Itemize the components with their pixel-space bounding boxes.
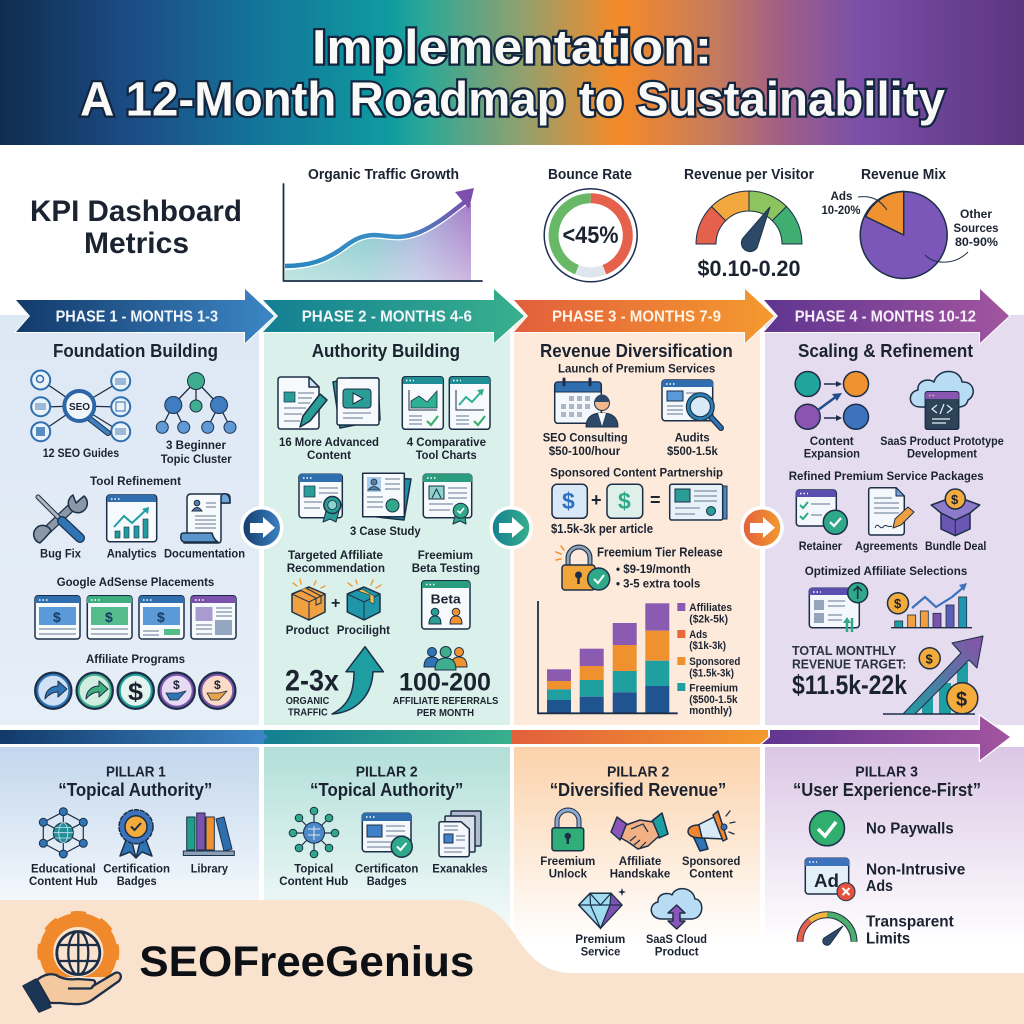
label: 16 more advanced content: Content: [307, 448, 351, 462]
label: 4 comparative tool charts: Tool Charts: [416, 448, 477, 462]
arrow: phase 4 banner: [764, 289, 1009, 343]
stat: total monthly revenue target: TOTAL MONTHLY: [792, 643, 897, 658]
icon: adsense layouts: $: [105, 609, 113, 625]
gauge: revenue per visitor: [684, 167, 814, 281]
label: topic cluster: Topic Cluster: [161, 452, 232, 466]
heading: user experience first: PILLAR 3: [855, 764, 918, 781]
icon: certification badge: [119, 810, 153, 858]
label: 16 more advanced content: 16 More Advanced: [279, 435, 379, 449]
label: library: Library: [191, 861, 228, 875]
label: affiliate handshake: [610, 854, 671, 881]
icon: freemium lock: [556, 546, 610, 590]
arrow: phase 1 banner: [16, 289, 274, 343]
chart: stacked revenue bars: [538, 601, 678, 713]
title line 1: Implementation:: [312, 22, 712, 74]
pie chart: revenue mix: [822, 167, 999, 278]
arrow: phase 3 to 4 connector: [742, 508, 782, 548]
label: premium service: [575, 932, 625, 959]
icon: adsense layouts: [35, 596, 236, 639]
heading: pillar 2: PILLAR 2: [356, 764, 418, 781]
legend: revenue streams: Ads: [689, 629, 707, 641]
arrow: phase 4 banner: PHASE 4 - MONTHS 10-12: [795, 309, 976, 326]
icon: revenue growth arrow with coins: $: [956, 689, 967, 711]
icon: sponsored equation: $: [618, 488, 631, 514]
label: retainer, agreements, bundle deal: Retainer: [799, 539, 842, 553]
label: certification badges: Certificaton: [355, 861, 418, 875]
icon: no paywalls check: [810, 811, 844, 846]
heading: foundation building: Foundation Building: [53, 341, 218, 361]
heading: pillar 2: [310, 764, 463, 800]
label: transparent limits: Transparent: [866, 914, 954, 931]
label: affiliate handshake: Affiliate: [619, 854, 662, 868]
icon: SEO guides: SEO: [69, 402, 90, 413]
label: 3 case study: 3 Case Study: [350, 524, 421, 538]
heading: revenue diversification: Revenue Diversification: [540, 341, 733, 361]
label: educational content hub: [29, 861, 98, 888]
label: audits price: [667, 431, 718, 458]
icon: gear and globe in hand logo: [23, 916, 121, 1012]
icon: sponsored equation: +: [591, 490, 602, 510]
chart: organic traffic growth: Organic Traffic Growth: [308, 167, 459, 183]
label: SaaS product prototype development: SaaS Product Prototype: [880, 434, 1004, 448]
label: topical content hub: Content Hub: [279, 874, 348, 888]
stat: 2-3x organic traffic: ORGANIC: [286, 695, 330, 707]
label: transparent limits: Limits: [866, 930, 910, 947]
icon row: affiliate programs: $: [128, 678, 143, 706]
label: SaaS cloud product: SaaS Cloud: [646, 932, 707, 946]
icon: product and procilight boxes: +: [331, 595, 340, 612]
panel: phase 3 revenue diversification: [514, 315, 760, 725]
arrow: bottom band purple head: [762, 716, 1010, 760]
icon: adsense layouts: $: [157, 609, 165, 625]
label: audits price: Audits: [675, 431, 710, 445]
icon: growth arrow: [332, 647, 383, 714]
KPI dashboard heading: KPI Dashboard: [30, 195, 242, 228]
label: bug fix, analytics, documentation: Analytics: [107, 547, 157, 561]
icon: bundle deal box: $: [951, 492, 959, 507]
label: retainer, agreements, bundle deal: Bundle Deal: [925, 539, 986, 553]
arrow: phase 2 banner: PHASE 2 - MONTHS 4-6: [302, 309, 472, 326]
legend: revenue streams: ($500-1.5k: [689, 694, 738, 706]
label: certification badges: [103, 861, 170, 888]
chart: organic traffic growth: [284, 167, 482, 281]
label: sponsored price: $1.5k-3k per article: [551, 521, 653, 536]
legend: revenue streams: [677, 602, 740, 717]
label: sponsored content: Sponsored: [682, 854, 740, 868]
heading: authority building: Authority Building: [312, 341, 460, 361]
label: certification badges: Certification: [103, 861, 170, 875]
label: certification badges: Badges: [367, 874, 407, 888]
heading: scaling and refinement: Scaling & Refinement: [798, 341, 973, 361]
icon: SaaS cloud prototype: [910, 372, 973, 429]
label: affiliate handshake: Handskake: [610, 867, 671, 881]
icon: beta window: Beta: [431, 591, 462, 606]
brand name: SEOFreeGenius: [139, 938, 474, 986]
icon: library books: [183, 813, 234, 856]
label: certification badges: Badges: [117, 874, 157, 888]
gauge: bounce rate: Bounce Rate: [548, 167, 632, 183]
icon: documentation scroll: [181, 494, 230, 543]
icon: SaaS cloud product: [651, 889, 702, 929]
heading: user experience first: “User Experience-First”: [793, 780, 981, 800]
legend: revenue streams: ($1.5k-3k): [689, 668, 734, 680]
label: educational content hub: Content Hub: [29, 874, 98, 888]
pie chart: revenue mix: Ads: [830, 189, 853, 203]
label: product and procilight: [286, 623, 390, 637]
gauge: revenue per visitor: $0.10-0.20: [698, 256, 800, 281]
label: product and procilight: Procilight: [337, 623, 390, 637]
label: freemium unlock: [540, 854, 595, 881]
heading: user experience first: [793, 764, 981, 800]
icon: example documents: [439, 811, 481, 857]
label: SEO consulting price: SEO Consulting: [543, 431, 628, 445]
text: freemium tier release details: Freemium Tier Release: [597, 546, 723, 560]
icon: revenue growth arrow with coins: $: [926, 652, 934, 666]
heading: diversified revenue: “Diversified Revenue”: [550, 780, 726, 800]
label: freemium unlock: Unlock: [549, 867, 587, 881]
subheading: google adsense placements: Google AdSense Placements: [57, 575, 215, 589]
title banner: [0, 0, 1024, 145]
legend: revenue streams: Freemium: [689, 683, 738, 695]
subheading: refined premium service packages: Refined Premium Service Packages: [789, 469, 984, 483]
icon: affiliate performance chart: $: [894, 596, 902, 611]
label: 4 comparative tool charts: [407, 435, 486, 462]
text: freemium tier release details: • 3-5 extra tools: [616, 577, 701, 591]
stat: total monthly revenue target: [792, 643, 908, 700]
icon: sponsored megaphone: [688, 811, 735, 851]
icon: sponsored equation: =: [650, 490, 661, 510]
label: educational content hub: Educational: [31, 861, 96, 875]
label: SEO consulting price: [543, 431, 628, 458]
icon row: affiliate programs: [36, 673, 235, 708]
subheading: sponsored content partnership: Sponsored Content Partnership: [550, 466, 723, 480]
arrow: phase 1 banner: PHASE 1 - MONTHS 1-3: [56, 309, 218, 326]
legend: revenue streams: ($2k-5k): [689, 614, 728, 626]
icon: revenue growth arrow with coins: [883, 636, 983, 714]
subheading: launch of premium services: Launch of Premium Services: [558, 362, 716, 376]
arrow: phase 3 banner: [514, 289, 774, 343]
icon: topical hub: [289, 807, 339, 858]
heading: diversified revenue: [550, 764, 726, 800]
heading: pillar 1: [58, 764, 212, 800]
label: topic cluster: [161, 438, 232, 466]
label: SaaS cloud product: Product: [655, 945, 699, 959]
legend: revenue streams: Sponsored: [689, 656, 740, 668]
icon: affiliate handshake: [611, 813, 668, 849]
icon: non-intrusive ad: Ad: [814, 871, 839, 891]
icon: advanced article with pencil: [278, 377, 327, 429]
heading: pillar 2: “Topical Authority”: [310, 780, 463, 800]
label: content expansion: Content: [810, 434, 854, 448]
label: transparent limits: [866, 914, 954, 947]
arrow: phase 2 banner: [263, 289, 524, 343]
panel: phase 2 authority building: [264, 315, 510, 725]
label: targeted affiliate recommendation: [287, 548, 385, 575]
icon: case study documents: [299, 473, 472, 524]
stat: 2-3x organic traffic: [285, 647, 383, 719]
title line 2: A 12-Month Roadmap to Sustainability: [80, 74, 945, 126]
icon: freemium unlock: [552, 810, 584, 851]
icon: sponsored equation: $: [562, 488, 575, 514]
icon: optimized selection window: [809, 583, 868, 632]
panel: pillar 2 diversified revenue: [514, 747, 760, 967]
arrow: phase 1 to 2 connector: [242, 508, 282, 548]
icon: bug fix tools: [34, 495, 87, 543]
label: freemium unlock: Freemium: [540, 854, 595, 868]
gauge: bounce rate: <45%: [562, 222, 618, 249]
label: premium service: Premium: [575, 932, 625, 946]
label: 12 SEO guides: 12 SEO Guides: [43, 446, 119, 460]
label: sponsored content: Content: [689, 867, 733, 881]
icon: audit window with magnifier: [662, 380, 721, 428]
icon: referral people: [424, 646, 467, 670]
pie chart: revenue mix: Revenue Mix: [861, 167, 946, 183]
icon: non-intrusive ad: [805, 858, 855, 901]
stat: 100-200 affiliate referrals: 100-200: [399, 669, 491, 697]
KPI dashboard heading: [30, 195, 242, 260]
label: content expansion: Expansion: [804, 446, 860, 460]
heading: pillar 1: PILLAR 1: [106, 764, 166, 781]
panel: pillar 2 topical authority: [264, 747, 510, 937]
stat: total monthly revenue target: $11.5k-22k: [792, 670, 908, 700]
label: freemium beta testing: [412, 548, 480, 575]
pie chart: revenue mix: Sources: [954, 221, 999, 235]
gauge: bounce rate: [544, 167, 637, 282]
label: retainer, agreements, bundle deal: Agreements: [855, 539, 918, 553]
panel: phase 1 foundation building: [0, 315, 259, 725]
label: SaaS product prototype development: Development: [907, 446, 977, 460]
label: topical content hub: Topical: [294, 861, 333, 875]
progress band beneath phases: [0, 730, 770, 744]
icon: product and procilight boxes: [292, 579, 381, 620]
subheading: optimized affiliate selections: Optimized Affiliate Selections: [805, 564, 968, 578]
pie chart: revenue mix: 10-20%: [822, 203, 861, 217]
stat: 100-200 affiliate referrals: PER MONTH: [417, 707, 474, 719]
label: non-intrusive ads: [866, 861, 965, 895]
label: no paywalls: No Paywalls: [866, 820, 954, 837]
icon: adsense layouts: $: [53, 609, 61, 625]
icon: bundle deal box: [931, 489, 980, 536]
panel: pillar 1 topical authority: [0, 747, 259, 902]
icon: educational hub: [39, 808, 87, 858]
label: examples: Exanakles: [432, 861, 488, 875]
label: topic cluster: 3 Beginner: [166, 438, 226, 452]
icon: content expansion network: [795, 372, 868, 429]
panel: phase 4 scaling and refinement: [765, 315, 1024, 725]
icon row: affiliate programs: $: [173, 678, 180, 692]
label: targeted affiliate recommendation: Targeted Affiliate: [288, 548, 383, 562]
arrow: phase 3 banner: PHASE 3 - MONTHS 7-9: [552, 309, 721, 326]
label: premium service: Service: [581, 945, 621, 959]
icon: consulting calendar and person: [555, 379, 618, 427]
icon: agreement document: [869, 488, 914, 535]
icon: affiliate performance chart: [888, 583, 972, 628]
icon: premium diamond: [579, 888, 626, 928]
icon: sponsored equation: [552, 484, 727, 520]
stat: total monthly revenue target: REVENUE TARGET:: [792, 657, 906, 672]
label: bug fix, analytics, documentation: Bug Fix: [40, 547, 81, 561]
label: bug fix, analytics, documentation: [40, 547, 245, 561]
icon: advanced video document: [333, 378, 380, 428]
legend: revenue streams: ($1k-3k): [689, 640, 726, 652]
gauge: revenue per visitor: Revenue per Visitor: [684, 167, 814, 183]
label: product and procilight: Product: [286, 623, 329, 637]
stat: 2-3x organic traffic: TRAFFIC: [288, 707, 328, 719]
label: bug fix, analytics, documentation: Documentation: [164, 547, 245, 561]
text: freemium tier release details: [597, 546, 723, 591]
arrow: phase 2 to 3 connector: [491, 508, 531, 548]
icon: retainer checklist: [796, 490, 847, 534]
KPI dashboard heading: Metrics: [84, 227, 189, 260]
legend: revenue streams: monthly): [689, 705, 732, 717]
heading: diversified revenue: PILLAR 2: [607, 764, 669, 781]
stat: 2-3x organic traffic: 2-3x: [285, 665, 339, 698]
icon: topic cluster tree: [156, 372, 236, 433]
label: targeted affiliate recommendation: Recommendation: [287, 561, 385, 575]
icon: beta window: [422, 581, 470, 629]
label: SaaS product prototype development: [880, 434, 1004, 460]
label: audits price: $500-1.5k: [667, 444, 718, 458]
icon: analytics window: [107, 495, 157, 542]
label: freemium beta testing: Freemium: [418, 548, 473, 562]
label: retainer, agreements, bundle deal: [799, 539, 986, 553]
pie chart: revenue mix: 80-90%: [955, 235, 998, 249]
label: non-intrusive ads: Non-Intrusive: [866, 861, 965, 878]
stat: 100-200 affiliate referrals: [393, 646, 498, 719]
label: SaaS cloud product: [646, 932, 707, 959]
pie chart: revenue mix: Other: [960, 207, 992, 221]
label: 16 more advanced content: [279, 435, 379, 462]
text: freemium tier release details: • $9-19/month: [616, 562, 691, 576]
subheading: affiliate programs: Affiliate Programs: [86, 652, 185, 666]
label: certification badges: [355, 861, 418, 888]
icon: certification window: [362, 813, 412, 857]
label: non-intrusive ads: Ads: [866, 878, 893, 895]
label: content expansion: [804, 434, 860, 460]
icon: SEO guides: [31, 370, 130, 441]
footer band with logo: [0, 900, 1024, 1024]
label: SEO consulting price: $50-100/hour: [549, 444, 621, 458]
label: freemium beta testing: Beta Testing: [412, 561, 480, 575]
icon row: affiliate programs: $: [214, 678, 221, 692]
stat: 100-200 affiliate referrals: AFFILIATE REFERRALS: [393, 695, 498, 707]
legend: revenue streams: Affiliates: [689, 602, 732, 614]
label: sponsored content: [682, 854, 740, 881]
heading: pillar 1: “Topical Authority”: [58, 780, 212, 800]
subheading: tool refinement: Tool Refinement: [90, 474, 181, 488]
label: topical content hub: [279, 861, 348, 888]
icon: comparative tool charts: [402, 377, 490, 429]
icon: transparent limits gauge: [800, 915, 854, 945]
panel: pillar 3 user experience first: [765, 747, 1024, 967]
label: 4 comparative tool charts: 4 Comparative: [407, 435, 486, 449]
